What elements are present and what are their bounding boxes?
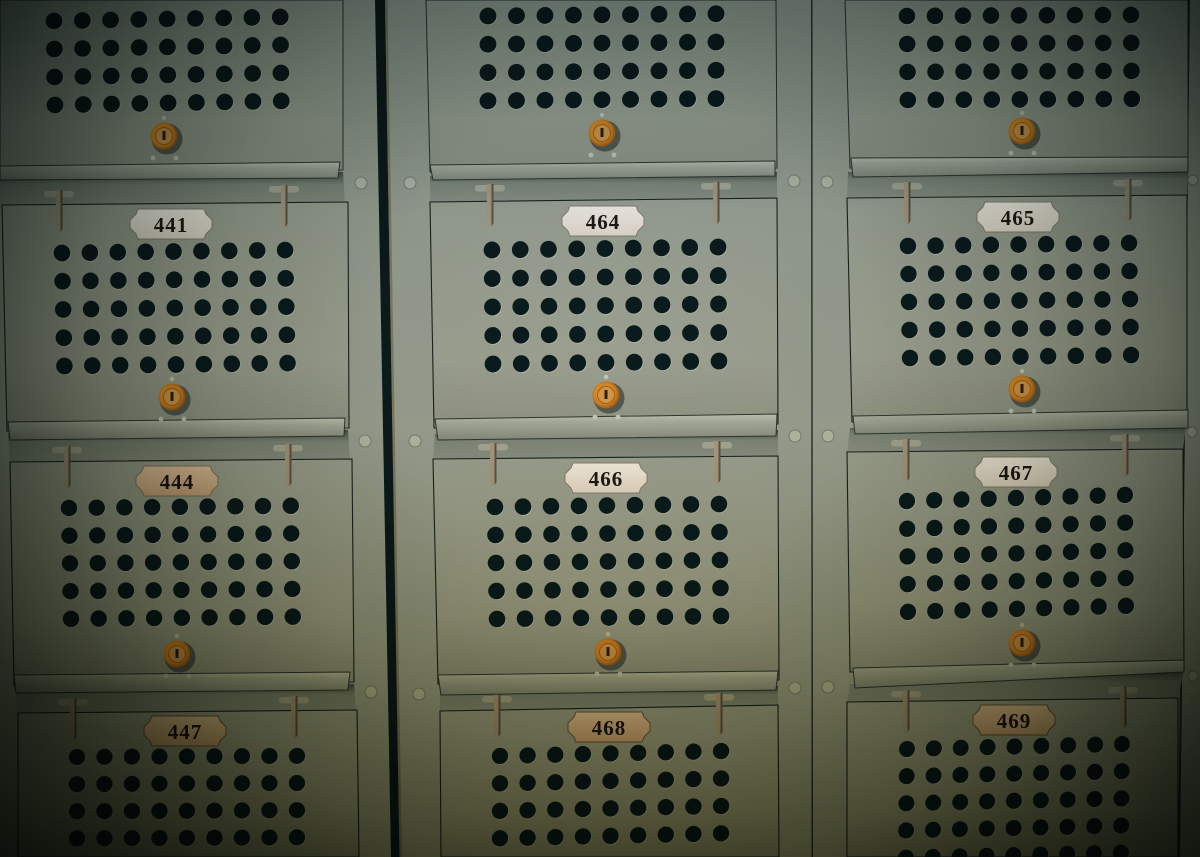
plate 467: [975, 457, 1057, 487]
holes: top left door: [46, 9, 290, 113]
plate 469: 469: [997, 709, 1031, 733]
frame: rusted seam on centre cabinet: [385, 0, 402, 857]
holes: door 447: [69, 748, 305, 847]
plate 464: [562, 206, 644, 236]
panel: right column doors: [845, 0, 1188, 857]
holes: door 467: [899, 487, 1134, 620]
plate 464: 464: [586, 210, 620, 234]
plate 447: [144, 716, 226, 746]
panel: brass locks: [150, 111, 1040, 678]
plate 469: [973, 705, 1055, 735]
plate 465: [977, 202, 1059, 232]
plate 444: 444: [160, 470, 194, 494]
frame: dark gap between left and centre cabinets: [375, 0, 400, 857]
door 465: [847, 195, 1187, 422]
holes: door 465: [900, 235, 1139, 366]
plate 467: 467: [999, 461, 1033, 485]
door 441: [2, 202, 349, 431]
holes: door 441: [54, 242, 296, 374]
door 466: [433, 456, 779, 684]
panel: centre column doors: [426, 0, 779, 857]
plate 444: [136, 466, 218, 496]
holes: door 466: [487, 496, 729, 627]
holes: top right door: [899, 7, 1140, 108]
holes: door 444: [61, 497, 301, 627]
lips under each door: [0, 157, 1188, 695]
panel: rivets on frame uprights: [355, 175, 1198, 700]
plate 468: 468: [592, 716, 626, 740]
door 444: [10, 459, 354, 686]
plate 441: 441: [154, 213, 188, 237]
holes: door 469: [898, 736, 1130, 857]
door 469: [847, 698, 1178, 857]
holes: door 468: [492, 743, 729, 847]
plate 465: 465: [1001, 206, 1035, 230]
plate 466: 466: [589, 467, 623, 491]
frame: right edge seam: [1178, 0, 1190, 857]
door 464: [430, 198, 778, 428]
door 468: [440, 705, 779, 857]
panel: left column doors: [0, 0, 359, 857]
door: top centre: [426, 0, 777, 172]
plate 441: [130, 209, 212, 239]
panel: door hinges: [44, 179, 1143, 740]
plate 466: [565, 463, 647, 493]
plate 447: 447: [168, 720, 202, 744]
door 467: [847, 449, 1184, 672]
plate 468: [568, 712, 650, 742]
door 447: [18, 710, 359, 857]
holes: top centre door: [480, 5, 724, 109]
holes: door 464: [484, 239, 727, 373]
door: top right: [845, 0, 1188, 168]
frame: horizontal shelves under the lips: [0, 168, 1188, 714]
door: top left: [0, 0, 343, 174]
frame: seam between centre and right cabinets: [811, 0, 813, 857]
